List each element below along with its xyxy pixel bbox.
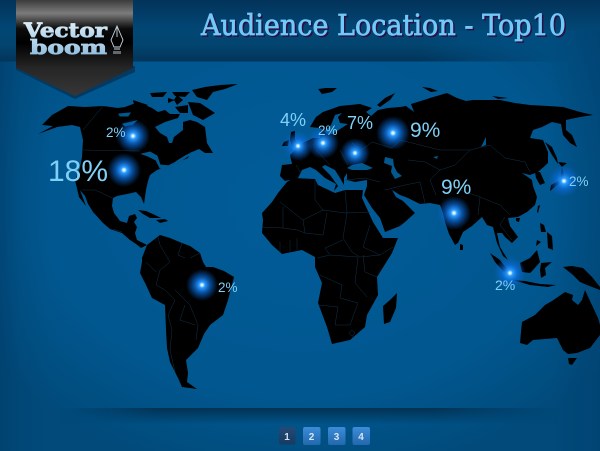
world map <box>38 84 600 389</box>
madagascar <box>383 293 397 324</box>
label: ukraine: 7% <box>347 113 373 133</box>
hotspot: brazil <box>186 269 218 301</box>
header band <box>0 0 600 62</box>
arctic islands <box>133 84 238 120</box>
label: indonesia: 2% <box>495 277 515 293</box>
button 2: 2 <box>309 432 315 443</box>
hotspot: germany <box>307 127 339 159</box>
logo badge <box>16 0 135 99</box>
hotspot: ukraine <box>340 138 370 168</box>
hotspot: india <box>437 196 471 230</box>
icon: pen nib <box>111 26 123 54</box>
button 4: 4 <box>358 432 364 443</box>
hotspot: canada <box>116 119 150 153</box>
taiwan, hainan, sri lanka <box>460 205 540 250</box>
pagination <box>279 427 370 445</box>
label: germany: 2% <box>318 123 338 138</box>
great lakes <box>119 113 193 168</box>
button 1 active: 1 <box>284 432 290 443</box>
hotspot: russia <box>376 116 410 150</box>
japan and sakhalin <box>535 142 567 191</box>
percentage labels <box>48 110 589 295</box>
logo text: Vector <box>23 19 108 42</box>
label: usa: 18% <box>48 155 108 188</box>
title: Audience Location - Top10 <box>202 10 568 44</box>
indonesia and philippines <box>490 223 600 290</box>
title: Audience Location - Top10 <box>200 8 566 42</box>
hotspots <box>107 116 580 301</box>
north america <box>38 104 213 248</box>
cuba and caribbean <box>138 210 168 223</box>
uk and ireland <box>282 131 299 147</box>
seas: black, caspian, baikal, aral <box>347 137 486 179</box>
label: russia: 9% <box>410 119 440 142</box>
bottom shadow <box>78 408 536 422</box>
africa <box>262 178 398 344</box>
label: canada: 2% <box>106 125 126 140</box>
logo text <box>23 19 108 59</box>
south america <box>140 235 234 389</box>
label: india: 9% <box>441 176 471 199</box>
australia <box>520 290 600 354</box>
hotspot: uk <box>283 131 313 161</box>
button 3: 3 <box>334 432 340 443</box>
tasmania <box>568 358 577 365</box>
logo text: boom <box>30 36 107 59</box>
arctic europe islands <box>318 87 508 107</box>
hotspot: japan <box>548 165 580 197</box>
label: japan: 2% <box>569 174 589 189</box>
label: brazil: 2% <box>218 280 238 295</box>
label: uk: 4% <box>280 110 306 130</box>
hotspot: usa <box>107 153 141 187</box>
country borders <box>82 106 530 372</box>
eurasia <box>280 93 593 260</box>
hotspot: indonesia <box>494 257 526 289</box>
